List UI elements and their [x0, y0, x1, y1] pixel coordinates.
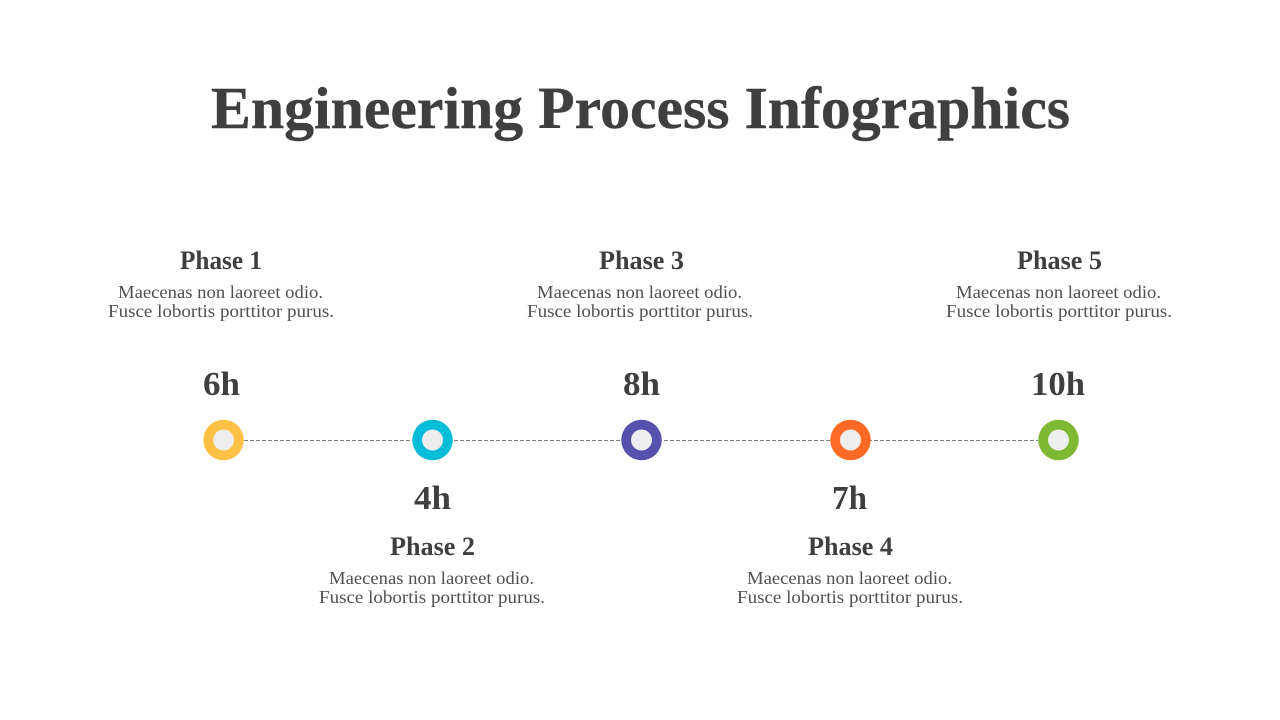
- phase 1: [108, 246, 334, 460]
- phase 5 hours: 10h: [1031, 366, 1085, 403]
- phase 2 heading: Phase 2: [390, 532, 475, 561]
- phase 2 description: Maecenas non laoreet odio.: [329, 568, 534, 588]
- phase 4 heading: Phase 4: [808, 532, 893, 561]
- phase 3 description: [527, 282, 753, 321]
- phase 5: [946, 246, 1172, 460]
- phase 5 description: [946, 282, 1172, 321]
- phase 1 description: Maecenas non laoreet odio.: [118, 282, 323, 302]
- phase 4 description: Maecenas non laoreet odio.: [747, 568, 952, 588]
- phase 4 description: Fusce lobortis porttitor purus.: [737, 587, 963, 607]
- phase 5 marker: [1038, 420, 1079, 460]
- phase 5 description: Maecenas non laoreet odio.: [956, 282, 1161, 302]
- phase 2: [319, 420, 545, 607]
- phase 4: [737, 420, 963, 607]
- phase 3 marker: [621, 420, 662, 460]
- title: Engineering Process Infographics: [211, 75, 1070, 141]
- phase 2 marker: [412, 420, 453, 460]
- phase 2 description: Fusce lobortis porttitor purus.: [319, 587, 545, 607]
- phase 1 description: [108, 282, 334, 321]
- phase 4 hours: 7h: [832, 480, 867, 517]
- timeline connector: [244, 440, 1038, 442]
- phase 3 hours: 8h: [623, 366, 660, 403]
- phase 1 hours: 6h: [203, 366, 240, 403]
- phase 1 heading: Phase 1: [180, 246, 262, 275]
- phase 1 description: Fusce lobortis porttitor purus.: [108, 301, 334, 321]
- phase 3 description: Maecenas non laoreet odio.: [537, 282, 742, 302]
- phase 4 description: [737, 568, 963, 607]
- phase 3: [527, 246, 753, 460]
- phase 4 marker: [830, 420, 871, 460]
- phase 2 hours: 4h: [414, 480, 451, 517]
- phase 2 description: [319, 568, 545, 607]
- phase 5 heading: Phase 5: [1017, 246, 1102, 275]
- phase 5 description: Fusce lobortis porttitor purus.: [946, 301, 1172, 321]
- phase 3 heading: Phase 3: [599, 246, 684, 275]
- phase 1 marker: [203, 420, 244, 460]
- phase 3 description: Fusce lobortis porttitor purus.: [527, 301, 753, 321]
